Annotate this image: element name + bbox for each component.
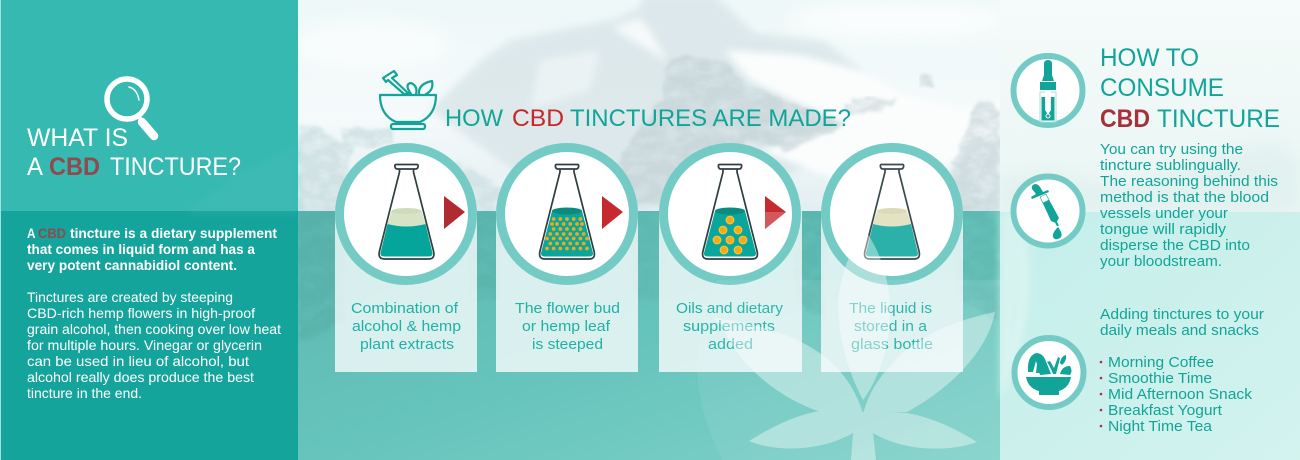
step 1 label [351, 301, 461, 353]
text block: sublingual method [1100, 141, 1278, 270]
heading: what is a CBD tincture: CBD [49, 153, 100, 181]
heading: what is a CBD tincture: TINCTURE? [110, 153, 241, 181]
list: ways to add tinctures: Smoothie Time [1108, 370, 1212, 387]
heading: how CBD tinctures are made [445, 105, 851, 132]
icon: tincture bottle [1014, 56, 1082, 125]
text block: how tinctures are created [27, 289, 281, 401]
panel: mountain background [290, 0, 1010, 215]
flask 3 with large dots [703, 164, 757, 259]
panel: lower teal band [298, 205, 1000, 460]
step 2 label: is steeped [532, 337, 603, 353]
step 2 label: The flower bud [515, 301, 620, 317]
text block: definition [27, 225, 277, 273]
list: ways to add tinctures: Breakfast Yogurt [1108, 402, 1223, 419]
text block: how tinctures are created: grain alcohol, then cooking over low heat [27, 321, 281, 337]
arrow 1 [444, 196, 465, 229]
text block: sublingual method: your bloodstream. [1100, 253, 1222, 270]
text block: definition: that comes in liquid form and has a [27, 241, 255, 257]
text block: sublingual method: tongue will rapidly [1100, 221, 1227, 238]
step 4 label: stored in a [854, 319, 928, 335]
step 4 label [849, 301, 933, 353]
text block: how tinctures are created: Tinctures are created by steeping [27, 289, 233, 305]
text block: how tinctures are created: can be used in lieu of alcohol, but [27, 353, 249, 369]
step 1 label: alcohol & hemp [352, 319, 461, 335]
text block: definition: A [27, 225, 36, 241]
heading: what is a CBD tincture: WHAT IS [27, 124, 128, 152]
heading: how CBD tinctures are made: HOW [445, 105, 503, 132]
step 3 label: added [708, 337, 753, 353]
flask 4 [865, 164, 919, 259]
step 4 label: glass bottle [851, 337, 933, 353]
heading: how CBD tinctures are made: TINCTURES ARE MADE? [570, 105, 851, 132]
text block: sublingual method: You can try using the [1100, 141, 1243, 158]
text block: sublingual method: tincture sublingually. [1100, 157, 1241, 174]
list: ways to add tinctures: Mid Afternoon Snack [1108, 386, 1253, 403]
list: ways to add tinctures: Morning Coffee [1108, 354, 1214, 371]
heading: how CBD tinctures are made: CBD [512, 105, 564, 132]
icon: magnifying glass [107, 79, 154, 136]
text block: definition: tincture is a dietary supplement [70, 225, 277, 241]
step 1 label: plant extracts [360, 337, 454, 353]
text block: how tinctures are created: for multiple hours. Vinegar or glycerin [27, 337, 262, 353]
heading: how to consume CBD tincture [1100, 44, 1280, 133]
icon: mortar and pestle [380, 71, 436, 129]
flask 1 [379, 164, 434, 259]
text block: adding tinctures: Adding tinctures to your [1100, 306, 1264, 323]
text block: how tinctures are created: CBD-rich hemp flowers in high-proof [27, 305, 255, 321]
step 3 label [676, 301, 784, 353]
heading: what is a CBD tincture [27, 124, 241, 181]
heading: how to consume CBD tincture: TINCTURE [1157, 105, 1280, 133]
heading: how to consume CBD tincture: CONSUME [1100, 74, 1224, 102]
text block: sublingual method: method is that the blood [1100, 189, 1269, 206]
flask 2 with small dots [540, 164, 594, 259]
list: ways to add tinctures [1100, 354, 1253, 435]
text block: sublingual method: disperse the CBD into [1100, 237, 1250, 254]
leaf watermark [697, 232, 1000, 460]
text block: how tinctures are created: alcohol really does produce the best [27, 369, 254, 385]
step 2 label: or hemp leaf [522, 319, 611, 335]
panel: left intro background [0, 0, 298, 460]
text block: adding tinctures: daily meals and snacks [1100, 322, 1259, 339]
text block: sublingual method: The reasoning behind this [1100, 173, 1278, 190]
step 4: stored in glass bottle [821, 148, 963, 372]
panel: right background [1000, 0, 1300, 460]
list: ways to add tinctures: Night Time Tea [1108, 418, 1213, 435]
step 2 label [515, 301, 620, 353]
text block: definition: very potent cannabidiol content. [27, 257, 237, 273]
arrow 3 [765, 196, 786, 229]
heading: how to consume CBD tincture: HOW TO [1100, 44, 1199, 72]
step 3 label: supplements [683, 319, 775, 335]
text block: adding tinctures [1100, 306, 1264, 339]
heading: what is a CBD tincture: A [27, 153, 43, 181]
text block: how tinctures are created: tincture in the end. [27, 385, 142, 401]
text block: sublingual method: vessels under your [1100, 205, 1228, 222]
step 3: oils added [659, 148, 802, 372]
text block: definition: CBD [38, 225, 66, 241]
step 3 label: Oils and dietary [676, 301, 784, 317]
arrow 2 [602, 196, 623, 229]
step 1 label: Combination of [351, 301, 459, 317]
step 2: flower steeped [496, 148, 638, 372]
heading: how to consume CBD tincture: CBD [1100, 105, 1150, 133]
step 1: alcohol and hemp [335, 148, 477, 372]
icon: salad bowl [1014, 338, 1084, 407]
icon: dropper [1014, 176, 1082, 246]
step 4 label: The liquid is [849, 301, 932, 317]
